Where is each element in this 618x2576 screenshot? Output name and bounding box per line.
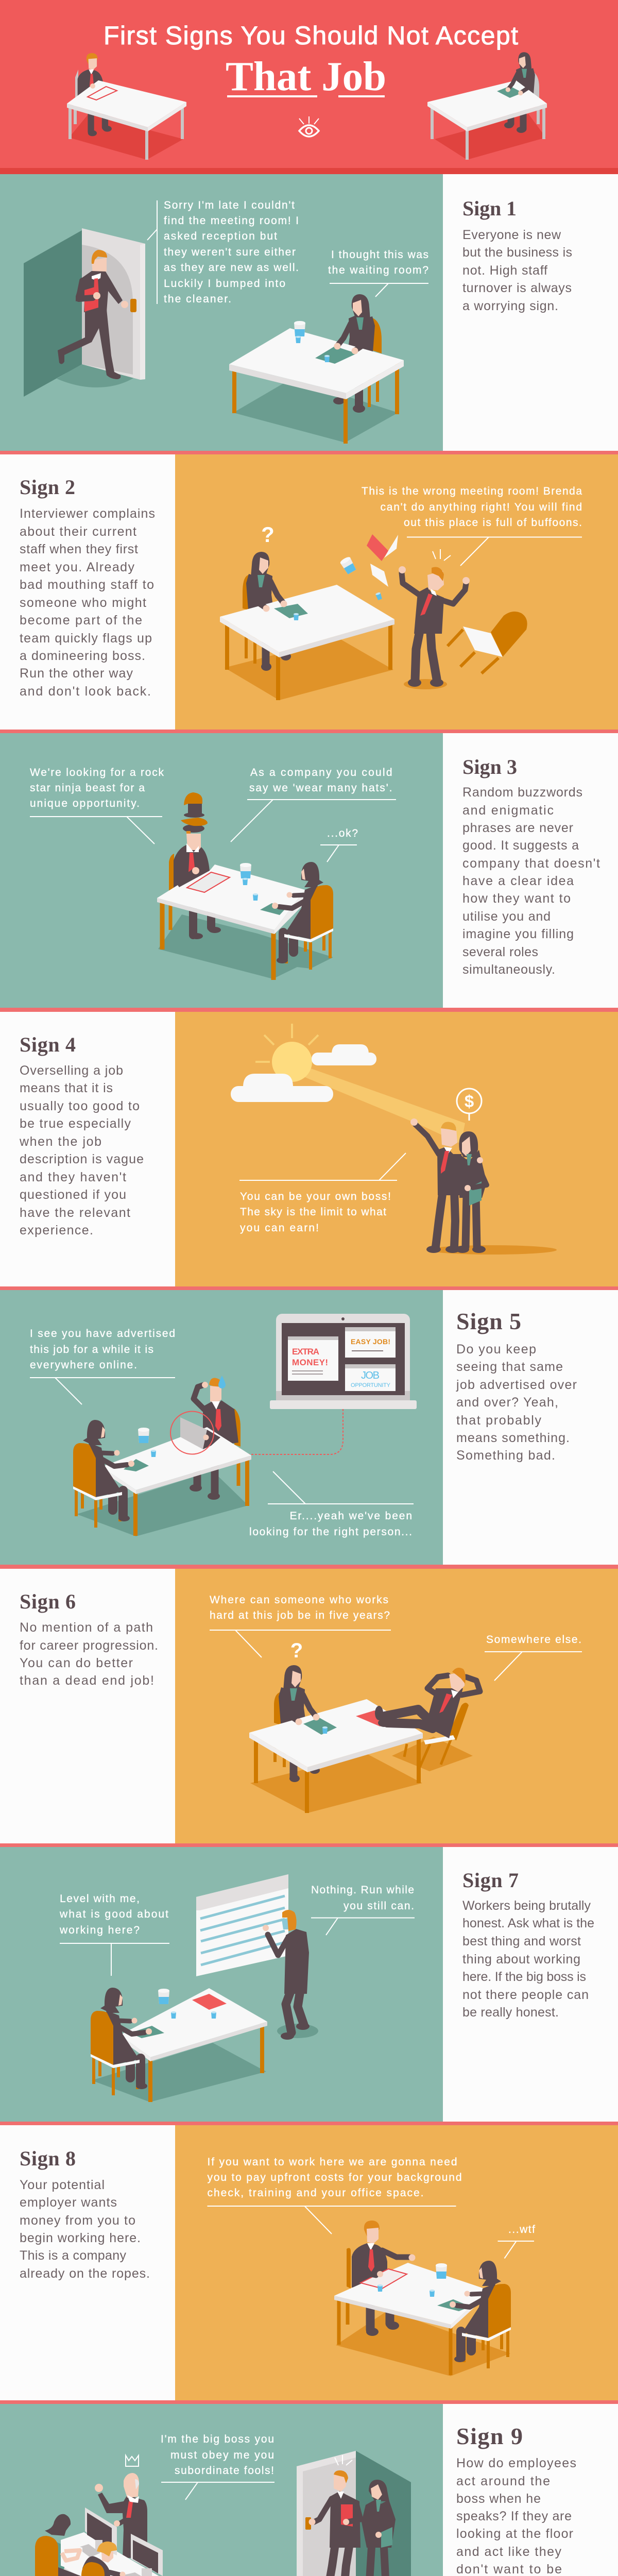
ad: easy job: EASY JOB! [351, 1337, 390, 1346]
dashed connector [197, 1409, 343, 1454]
text: sign 7: not there people can [462, 1988, 589, 2002]
divider band 5 [0, 1565, 618, 1569]
text: sign 7 [462, 1869, 594, 2020]
text: sign 9: boss when he [456, 2492, 541, 2506]
speech bubble: waiting room: the waiting room? [328, 264, 428, 276]
text: sign 7: be really honest. [462, 2005, 559, 2020]
text: sign 6: for career progression. [20, 1638, 158, 1653]
speech bubble: late arrival: asked reception but [164, 230, 277, 242]
divider band 6 [0, 1843, 618, 1847]
text: sign 4: description is vague [20, 1152, 144, 1166]
speech bubble: advertised: this job for a while it is [30, 1344, 153, 1355]
speech bubble: late arrival: Luckily I bumped into [164, 278, 285, 290]
speech bubble: five years: Where can someone who works [210, 1594, 388, 1606]
text: sign 8: employer wants [20, 2195, 117, 2210]
characters: two employees at door [309, 2470, 396, 2576]
speech bubble: right person: looking for the right person... [249, 1526, 412, 1538]
text: sign 8: already on the ropes. [20, 2266, 150, 2281]
speech bubble: five years [210, 1594, 391, 1657]
speech bubble: many hats: say we 'wear many hats'. [249, 782, 392, 794]
text: sign 2: Sign 2 [20, 476, 75, 499]
flying objects [339, 534, 398, 600]
speech bubble: angry boss [362, 485, 582, 566]
text: sign 2: become part of the [20, 613, 142, 628]
speech bubble: many hats [231, 767, 396, 842]
ad: job opportunity [345, 1364, 396, 1391]
toppled chair [448, 612, 527, 673]
characters: boss and candidate [410, 1118, 557, 1255]
panel: sign 8 illustration [175, 2125, 618, 2400]
speech bubble: big boss: subordinate fools! [175, 2465, 274, 2477]
text: sign 5: that probably [456, 1413, 542, 1428]
text: sign 6 [20, 1590, 158, 1688]
ad: job opportunity: JOB [361, 1370, 380, 1381]
icon: dollar balloon [457, 1089, 482, 1121]
panel: sign 3 illustration [0, 733, 443, 1008]
text: sign 2: team quickly flags up [20, 631, 152, 646]
text: sign 3: have a clear idea [462, 874, 574, 888]
text: sign 3: utilise you and [462, 909, 551, 924]
speech bubble: level with me: what is good about [59, 1908, 168, 1920]
text: sign 3 [462, 755, 600, 977]
speech bubble: somewhere else: Somewhere else. [486, 1634, 581, 1646]
text: sign 2: Interviewer complains [20, 506, 155, 521]
text: sign 9: How do employees [456, 2456, 576, 2470]
text: sign 6: than a dead end job! [20, 1673, 154, 1688]
character: man arriving late [58, 250, 128, 379]
text: sign 5 [456, 1308, 577, 1463]
text: sign 1: not. High staff [462, 263, 547, 278]
icon: door with wall [24, 228, 145, 397]
illustration: candidate at right table [427, 52, 547, 160]
divider band 3 [0, 1008, 618, 1012]
icon: crown [126, 2455, 139, 2466]
speech bubble: late arrival: Sorry I'm late I couldn't [164, 199, 295, 211]
ad: extra money: EXTRA [292, 1347, 319, 1357]
text: sign 3: company that doesn't [462, 856, 600, 871]
worker 1 [35, 2514, 82, 2576]
table scene with fee request [334, 2221, 511, 2376]
text: sign 6: No mention of a path [20, 1620, 153, 1635]
text: sign 9: act around the [456, 2474, 550, 2488]
table with interviewer [229, 294, 404, 444]
sun with rays [255, 1024, 465, 1144]
panel: sign 7 illustration [0, 1847, 443, 2122]
text: sign 1: but the business is [462, 245, 572, 260]
ad: easy job [345, 1327, 396, 1358]
speech bubble: own boss: The sky is the limit to what [240, 1206, 386, 1218]
title line one: First Signs You Should Not Accept [104, 21, 518, 50]
speech bubble: right person [249, 1471, 414, 1538]
speech bubble: own boss: you can earn! [240, 1222, 319, 1234]
text: sign 2: about their current [20, 524, 136, 539]
speech bubble: ok [320, 827, 358, 862]
text: sign 5: means something. [456, 1431, 570, 1445]
speech bubble: own boss [239, 1153, 406, 1234]
speech bubble: late arrival: they weren't sure either [164, 246, 296, 258]
text: sign 4: and they haven't [20, 1170, 126, 1184]
text: sign 7: Sign 7 [462, 1869, 519, 1892]
interviewer with hats [174, 792, 221, 939]
speech bubble: rock star ninja: star ninja beast for a [30, 782, 145, 794]
question mark: ? [290, 1639, 303, 1662]
title line two: That Job [226, 53, 386, 99]
speech bubble: own boss: You can be your own boss! [240, 1191, 391, 1202]
speech bubble: somewhere else [485, 1634, 582, 1681]
text: sign 2: and don't look back. [20, 684, 151, 699]
hats stack [181, 792, 208, 834]
divider band 4 [0, 1286, 618, 1290]
text: sign 8: Your potential [20, 2178, 105, 2192]
text: sign 2: meet you. Already [20, 560, 135, 574]
text: sign 3: phrases are never [462, 821, 573, 835]
speech bubble: run [311, 1884, 415, 1935]
text: sign 4: Sign 4 [20, 1033, 76, 1056]
text: sign 2: someone who might [20, 596, 146, 610]
speech bubble: big boss: must obey me you [170, 2449, 274, 2461]
speech bubble: rock star ninja: We're looking for a rock [30, 767, 164, 778]
speech bubble: late arrival: the cleaner. [164, 293, 231, 305]
worker 2 [81, 2541, 141, 2576]
ad: extra money: MONEY! [292, 1358, 328, 1367]
table scene with hats [157, 792, 333, 980]
text: sign 4: when the job [19, 1134, 101, 1149]
text: sign 1: Sign 1 [462, 197, 517, 220]
speech bubble: advertised: everywhere online. [30, 1359, 137, 1371]
speech bubble: ok: ...ok? [327, 827, 358, 839]
speech bubble: late arrival: find the meeting room! I [164, 215, 299, 227]
speech bubble: upfront costs: you to pay upfront costs for your background [207, 2172, 461, 2183]
small laptop [180, 1417, 220, 1449]
text: sign 2: a domineering boss. [20, 649, 145, 663]
speech bubble: level with me: Level with me, [60, 1893, 140, 1905]
text: sign 8: begin working here. [20, 2231, 141, 2245]
text: sign 4: be true especially [20, 1116, 131, 1131]
table scene with reclining boss [249, 1665, 480, 1813]
speech bubble: many hats: As a company you could [250, 767, 392, 778]
panel: sign 5 illustration [0, 1290, 443, 1565]
speech bubble: advertised [30, 1328, 175, 1404]
text: sign 1: turnover is always [462, 281, 572, 295]
panel: sign 4 illustration [175, 1012, 618, 1286]
text: sign 9: and act like they [456, 2545, 561, 2559]
speech bubble: angry boss: can't do anything right! You will find [380, 501, 582, 513]
question mark: ? [261, 522, 274, 547]
text: sign 5: seeing that same [456, 1360, 563, 1374]
speech bubble: angry boss: This is the wrong meeting room! Brenda [362, 485, 582, 497]
door with wall [297, 2451, 411, 2576]
office desk scene [35, 2473, 188, 2576]
speech bubble: advertised: I see you have advertised [30, 1328, 175, 1340]
text: sign 2 [20, 476, 155, 699]
speech bubble: big boss [161, 2433, 274, 2500]
speech bubble: waiting room: I thought this was [331, 249, 428, 261]
text: sign 5: Sign 5 [456, 1308, 521, 1334]
panel: sign 2 illustration [175, 454, 618, 730]
speech bubble: run: you still can. [344, 1900, 414, 1912]
character: shouting boss [399, 549, 470, 689]
panel: sign 1 illustration [0, 174, 443, 451]
text: sign 4: questioned if you [20, 1188, 126, 1202]
text: sign 5: job advertised over [456, 1378, 577, 1392]
header banner [0, 0, 618, 174]
text: sign 4: usually too good to [20, 1099, 140, 1113]
clouds [231, 1044, 376, 1102]
text: sign 6: You can do better [20, 1656, 133, 1670]
text: sign 3: Random buzzwords [462, 785, 582, 800]
character: man peering through blinds [263, 1910, 318, 2040]
speech bubble: upfront costs: If you want to work here we are gonna need [207, 2156, 457, 2168]
monitors [77, 2507, 163, 2576]
speech bubble: level with me: working here? [59, 1924, 140, 1936]
text: sign 3: imagine you filling [462, 927, 574, 941]
text: sign 2: Run the other way [20, 666, 133, 681]
speech bubble: late arrival [147, 199, 299, 305]
text: sign 7: Workers being brutally [462, 1899, 591, 1913]
table scene from behind [91, 1988, 267, 2102]
speech bubble: rock star ninja: unique opportunity. [30, 798, 140, 809]
title underline [227, 95, 385, 97]
text: sign 1 [462, 197, 572, 313]
text: sign 8 [20, 2147, 150, 2281]
reclining boss [375, 1668, 480, 1767]
text: sign 1: a worrying sign. [462, 299, 558, 313]
speech bubble: upfront costs: check, training and your office space. [207, 2187, 423, 2199]
panel: sign 6 illustration [175, 1569, 618, 1843]
text: sign 9: looking at the floor [456, 2527, 573, 2541]
ad: extra money [288, 1336, 338, 1381]
speech bubble: five years: hard at this job be in five years? [210, 1609, 390, 1621]
text: sign 4: have the relevant [20, 1206, 130, 1220]
text: sign 3: how they want to [462, 891, 571, 906]
speech bubble: big boss: I'm the big boss you [161, 2433, 274, 2445]
text: sign 9: Sign 9 [456, 2423, 523, 2449]
text: sign 3: good. It suggests a [462, 838, 579, 853]
boss [95, 2473, 147, 2558]
speech bubble: wtf [497, 2224, 535, 2259]
text: sign 5: Something bad. [456, 1448, 555, 1463]
text: sign 3: and enigmatic [462, 803, 554, 818]
divider band 8 [0, 2400, 618, 2404]
speech bubble: late arrival: as they are new as well. [164, 262, 299, 274]
window blinds [196, 1874, 288, 1976]
table with candidate [220, 552, 394, 700]
text: sign 8: This is a company [20, 2248, 127, 2263]
text: sign 2: bad mouthing staff to [20, 578, 154, 592]
speech bubble: upfront costs [207, 2156, 461, 2234]
divider band 1 [0, 451, 618, 454]
text: sign 1: Everyone is new [462, 228, 561, 242]
illustration: interviewer at left table [67, 53, 186, 160]
speech bubble: waiting room [328, 249, 428, 297]
text: sign 8: money from you to [20, 2213, 135, 2228]
divider band 7 [0, 2122, 618, 2125]
speech bubble: wtf: ...wtf [508, 2224, 535, 2235]
text: sign 8: Sign 8 [20, 2147, 76, 2170]
speech bubble: rock star ninja [30, 767, 164, 844]
text: sign 3: Sign 3 [462, 755, 517, 778]
text: sign 4 [19, 1033, 144, 1238]
text: sign 6: Sign 6 [20, 1590, 76, 1613]
divider band 2 [0, 730, 618, 733]
panel: sign 9 illustration [0, 2404, 443, 2576]
text: sign 3: simultaneously. [462, 962, 555, 977]
table scene with sweating interviewer [73, 1376, 251, 1536]
icon: dollar balloon: $ [465, 1092, 474, 1111]
speech bubble: angry boss: out this place is full of buffoons. [404, 517, 582, 529]
text: sign 5: Do you keep [456, 1342, 536, 1357]
text: sign 7: best thing and worst [462, 1934, 581, 1948]
speech bubble: run: Nothing. Run while [311, 1884, 414, 1896]
ad: job opportunity: OPPORTUNITY [351, 1382, 391, 1388]
text: sign 2: staff when they first [20, 542, 138, 556]
speech bubble: level with me [59, 1893, 169, 1976]
text: sign 7: here. If the big boss is [462, 1970, 586, 1984]
text: sign 7: thing about working [462, 1952, 580, 1967]
text: sign 4: means that it is [20, 1081, 113, 1095]
text: sign 7: honest. Ask what is the [462, 1916, 594, 1930]
speech bubble: right person: Er....yeah we've been [289, 1510, 412, 1522]
text: sign 4: experience. [20, 1223, 93, 1238]
text: sign 4: Overselling a job [20, 1063, 123, 1078]
text: sign 9: speaks? If they are [456, 2509, 572, 2523]
laptop with job ads [270, 1314, 417, 1409]
text: sign 9 [456, 2423, 576, 2576]
text: sign 3: several roles [462, 945, 538, 959]
text: sign 5: and over? Yeah, [456, 1395, 558, 1410]
icon: eye [299, 116, 319, 137]
